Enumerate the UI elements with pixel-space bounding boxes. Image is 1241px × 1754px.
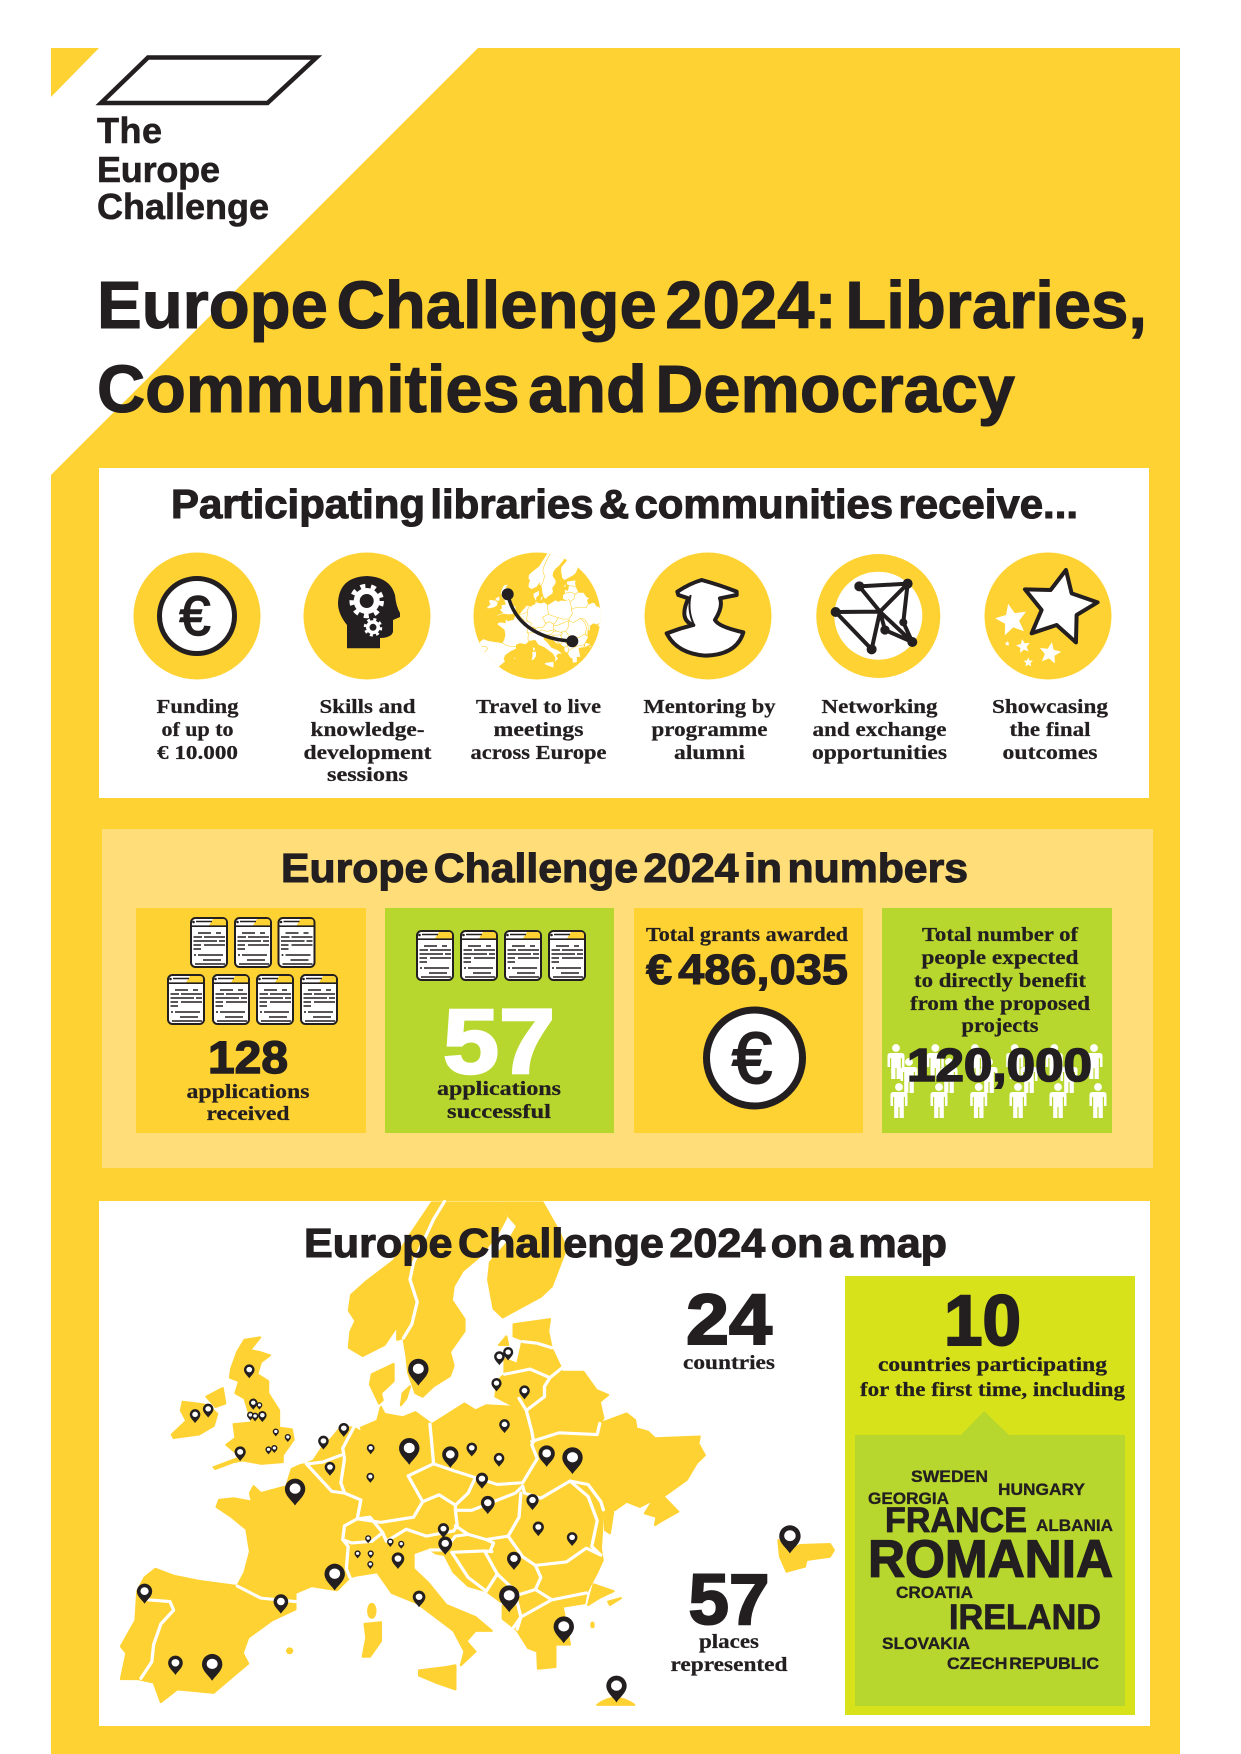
callout: 10 new countries: 10 bbox=[944, 1282, 1021, 1361]
icon: euro coin: € bbox=[732, 1019, 772, 1099]
card: people benefiting bbox=[882, 908, 1112, 1133]
card: applications received bbox=[136, 908, 366, 1133]
card: applications successful bbox=[385, 908, 614, 1133]
word cloud of countries: SWEDEN bbox=[911, 1467, 988, 1486]
logo: The Europe Challenge: Europe bbox=[97, 149, 220, 190]
icon: crowd of people bbox=[888, 1044, 1106, 1118]
benefit: networking bbox=[812, 554, 947, 764]
panel: on a map bbox=[99, 1201, 1150, 1726]
panel: participating libraries and communities receive bbox=[99, 468, 1149, 798]
card: applications successful: successful bbox=[447, 1101, 551, 1123]
word cloud of countries: ALBANIA bbox=[1036, 1516, 1113, 1535]
logo: The Europe Challenge: Challenge bbox=[97, 186, 269, 227]
heading: on a map: Europe Challenge 2024 on a map bbox=[304, 1220, 947, 1266]
card: people benefiting: 120,000 bbox=[907, 1039, 1092, 1091]
benefit: skills: knowledge- bbox=[310, 719, 425, 741]
word cloud of countries: GEORGIA bbox=[868, 1489, 949, 1508]
stat: 24 countries: countries bbox=[683, 1352, 775, 1374]
benefit: funding bbox=[134, 552, 260, 764]
logo: The Europe Challenge bbox=[97, 58, 316, 227]
card: applications received: received bbox=[206, 1103, 290, 1125]
logo: The Europe Challenge: The bbox=[97, 110, 162, 151]
card: total grants bbox=[634, 908, 863, 1133]
heading: receive: Participating libraries & communities receive... bbox=[171, 481, 1078, 527]
benefit: mentoring: programme bbox=[652, 719, 768, 741]
word cloud of countries: CROATIA bbox=[896, 1583, 973, 1602]
benefit: funding: of up to bbox=[162, 719, 234, 741]
card: people benefiting: from the proposed bbox=[910, 993, 1091, 1015]
benefit: travel: meetings bbox=[494, 719, 584, 741]
title: Europe Challenge 2024: Libraries, bbox=[97, 268, 1147, 343]
benefit: showcasing: the final bbox=[1010, 719, 1091, 741]
icon: euro coin bbox=[706, 1010, 802, 1106]
card: people benefiting: Total number of bbox=[922, 924, 1079, 946]
benefit: showcasing: outcomes bbox=[1002, 742, 1098, 764]
benefit: mentoring: Mentoring by bbox=[644, 696, 776, 718]
benefit: mentoring bbox=[644, 552, 776, 764]
benefit: funding: € bbox=[179, 584, 211, 647]
title: Communities and Democracy bbox=[97, 352, 1015, 427]
benefit: travel bbox=[471, 552, 606, 764]
word cloud of countries: SLOVAKIA bbox=[882, 1634, 970, 1653]
word cloud of countries bbox=[868, 1467, 1113, 1673]
stat: 57 places represented: 57 bbox=[688, 1561, 770, 1640]
word cloud of countries: FRANCE bbox=[885, 1501, 1027, 1540]
benefit: networking: and exchange bbox=[812, 719, 946, 741]
benefit: skills: sessions bbox=[327, 764, 408, 786]
word cloud of countries: HUNGARY bbox=[998, 1480, 1086, 1499]
benefit: skills: Skills and bbox=[320, 696, 416, 718]
title bbox=[97, 268, 1147, 427]
stat: 57 places represented: represented bbox=[670, 1654, 788, 1676]
benefit: skills bbox=[304, 552, 432, 786]
benefit: travel: across Europe bbox=[470, 742, 606, 764]
benefit: showcasing: Showcasing bbox=[992, 696, 1109, 718]
benefit: funding: Funding bbox=[156, 696, 239, 718]
word cloud of countries: CZECH REPUBLIC bbox=[947, 1654, 1099, 1673]
benefit: networking: Networking bbox=[822, 696, 938, 718]
callout: 10 new countries bbox=[845, 1276, 1135, 1715]
benefit: mentoring: alumni bbox=[674, 742, 745, 764]
stat: 24 countries: 24 bbox=[686, 1281, 773, 1360]
card: applications received: 128 bbox=[208, 1032, 288, 1083]
benefit: networking: opportunities bbox=[812, 742, 947, 764]
card: people benefiting: projects bbox=[962, 1015, 1039, 1037]
card: applications successful: applications bbox=[437, 1078, 561, 1100]
map of Europe with location pins bbox=[121, 1201, 834, 1705]
card: total grants: Total grants awarded bbox=[646, 924, 849, 946]
heading: in numbers: Europe Challenge 2024 in numbers bbox=[281, 845, 968, 891]
benefit: showcasing bbox=[984, 552, 1112, 764]
word cloud of countries: ROMANIA bbox=[868, 1530, 1113, 1589]
panel: in numbers bbox=[102, 829, 1153, 1168]
card: applications received: applications bbox=[186, 1081, 310, 1103]
card: applications successful: 57 bbox=[443, 991, 555, 1093]
callout: 10 new countries: countries participating bbox=[878, 1354, 1108, 1376]
benefit: travel: Travel to live bbox=[476, 696, 601, 718]
word cloud of countries: IRELAND bbox=[949, 1598, 1101, 1637]
callout: 10 new countries: for the first time, including bbox=[860, 1379, 1126, 1401]
benefit: funding: € 10.000 bbox=[157, 742, 238, 764]
card: people benefiting: people expected bbox=[922, 947, 1079, 969]
stat: 57 places represented: places bbox=[699, 1631, 759, 1653]
card: total grants: € 486,035 bbox=[646, 946, 848, 994]
benefit: skills: development bbox=[304, 742, 432, 764]
card: people benefiting: to directly benefit bbox=[914, 970, 1086, 992]
stat: 57 places represented bbox=[670, 1561, 788, 1676]
